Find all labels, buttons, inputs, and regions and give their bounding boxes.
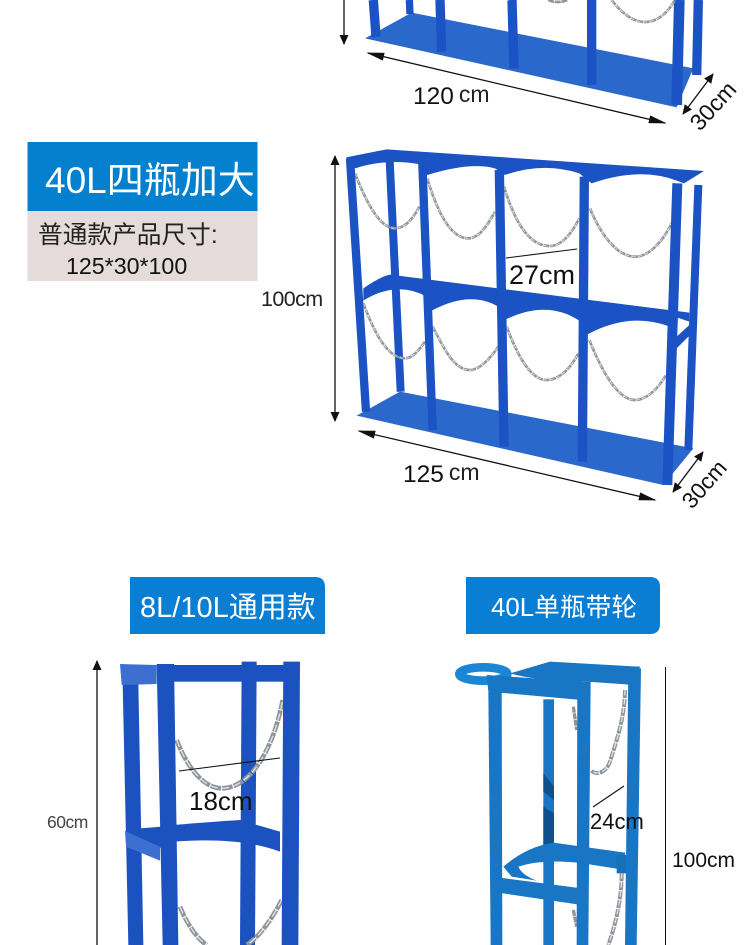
height arrow 60cm [96, 661, 98, 945]
label 30cm: 30cm [677, 455, 732, 513]
chains [355, 173, 672, 400]
inner width line 18cm [179, 758, 280, 771]
label 120 cm: 120 [413, 83, 454, 110]
label 18cm: 18cm [189, 786, 253, 816]
side posts [488, 668, 641, 945]
side bracket [617, 855, 632, 873]
curved mid ring [503, 843, 625, 881]
label 100cm: 100cm [261, 287, 323, 311]
title text: 40L四瓶加大 [45, 160, 255, 201]
middle side brace [677, 318, 697, 348]
button: 40L single bottle with wheels [466, 577, 660, 634]
front posts [157, 662, 300, 945]
top front band [487, 675, 582, 700]
top front bar [172, 665, 287, 682]
button: 8L/10L universal [130, 577, 325, 634]
label 27cm: 27cm [509, 260, 575, 290]
product image: 40L four bottle rack [346, 149, 704, 485]
size numbers: 125*30*100 [66, 253, 187, 279]
mid curved band [173, 820, 280, 852]
product image: 40L single bottle rack [459, 662, 641, 945]
label 125 cm: 125 [403, 461, 444, 488]
label 100cm single rack: 100cm [672, 849, 735, 872]
height arrow 100cm [334, 156, 336, 421]
depth arrow 30cm [673, 452, 703, 492]
product image: 8L/10L rack [120, 662, 300, 945]
width arrow 120 [368, 53, 665, 123]
label 60cm: 60cm [47, 812, 88, 832]
base plate [357, 392, 693, 485]
rack posts [373, 0, 698, 105]
product image: cropped top rack 120cm [365, 0, 698, 107]
chains [177, 700, 283, 945]
label 24cm: 24cm [590, 809, 644, 834]
mid side bar [125, 831, 160, 861]
label 120 cm: cm [459, 81, 490, 107]
button text: 40L单瓶带轮 [491, 593, 637, 622]
back post [543, 699, 554, 945]
mid top surface [125, 827, 162, 848]
button text: 8L/10L通用款 [140, 591, 316, 624]
middle frame with curved bands [363, 275, 689, 334]
rack base plate [365, 13, 693, 107]
button shape [466, 577, 660, 634]
size caption: 普通款产品尺寸: [38, 221, 218, 249]
post shadows [543, 773, 554, 847]
size background [28, 211, 258, 281]
inner width line 27cm [506, 249, 577, 258]
rack chains [548, 0, 675, 22]
label 30cm top rack: 30cm [684, 76, 741, 135]
handle ring [459, 667, 507, 681]
height line 100cm [664, 667, 666, 945]
depth arrow top rack [683, 74, 713, 114]
panel: 40L four bottle title [28, 142, 258, 281]
chains [573, 690, 625, 945]
height arrow top rack [343, 0, 345, 44]
back posts [123, 662, 257, 945]
inner width line 24cm [593, 786, 624, 807]
back posts [389, 153, 698, 450]
front posts [350, 158, 677, 485]
top side bar [120, 664, 157, 685]
button shape [130, 577, 325, 634]
top back band [510, 662, 640, 685]
top frame with curved bands [346, 149, 704, 183]
width arrow 125 [359, 431, 655, 500]
label 125 cm: cm [449, 459, 480, 485]
mid front band [492, 877, 582, 905]
title background [28, 142, 258, 211]
